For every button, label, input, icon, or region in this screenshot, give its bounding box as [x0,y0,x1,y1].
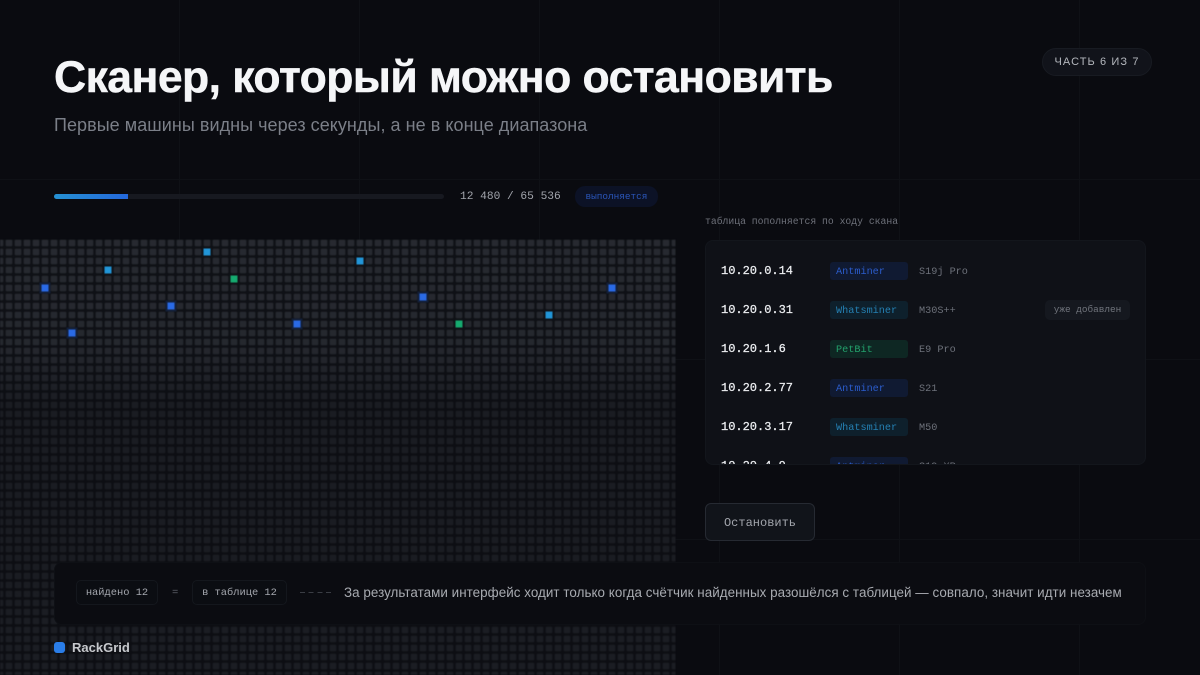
explanation text: За результатами интерфейс ходит только когда счётчик найденных разошёлся с таблицей — совпало, значит идти незачем [344,585,1122,600]
table caption: таблица пополняется по ходу скана [705,216,898,227]
row 5 [721,418,937,436]
row 5: M50 [919,423,937,434]
row 3 [721,340,956,358]
progress bar [54,194,444,199]
row 6 clipped [721,457,956,465]
subtitle: Первые машины видны через секунды, а не в конце диапазона [54,115,587,135]
row 4 [721,379,937,397]
dashed connector [300,592,331,593]
scan dot grid [0,240,676,675]
stop button: Остановить [724,516,796,530]
progress counter: 12 480 / 65 536 [460,191,561,203]
title: Сканер, который можно остановить [54,53,833,102]
row 3: E9 Pro [919,345,956,356]
equals sign: = [172,587,178,599]
brand logo [54,642,65,653]
row 1 [721,262,968,280]
row 5: Whatsminer [836,423,897,434]
row 2: M30S++ [919,306,956,317]
panel: results table [705,240,1146,465]
chip: found count [76,580,158,605]
part badge: ЧАСТЬ 6 ИЗ 7 [1054,56,1140,68]
already added tag: уже добавлен [1054,304,1121,315]
row 4: S21 [919,384,937,395]
brand name: RackGrid [72,640,130,655]
row 3: 10.20.1.6 [721,342,786,356]
progress fill [54,194,128,199]
row 2: 10.20.0.31 [721,303,793,317]
row 4: 10.20.2.77 [721,381,793,395]
row 1: Antminer [836,267,885,278]
row 2: Whatsminer [836,306,897,317]
chip: table count [192,580,287,605]
status chip [575,186,658,207]
part badge [1042,48,1152,76]
row 5: 10.20.3.17 [721,420,793,434]
chip: found count: найдено 12 [86,587,148,599]
status chip: выполняется [586,191,647,202]
row 4: Antminer [836,384,885,395]
row 2 [721,301,1121,319]
already added tag [1045,300,1130,320]
row 1: 10.20.0.14 [721,264,793,278]
found hosts on the scan grid [40,248,618,338]
panel: reconciliation strip [54,562,1146,625]
row 3: PetBit [836,345,873,356]
stop button [705,503,815,541]
row 1: S19j Pro [919,267,968,278]
chip: table count: в таблице 12 [202,587,277,599]
